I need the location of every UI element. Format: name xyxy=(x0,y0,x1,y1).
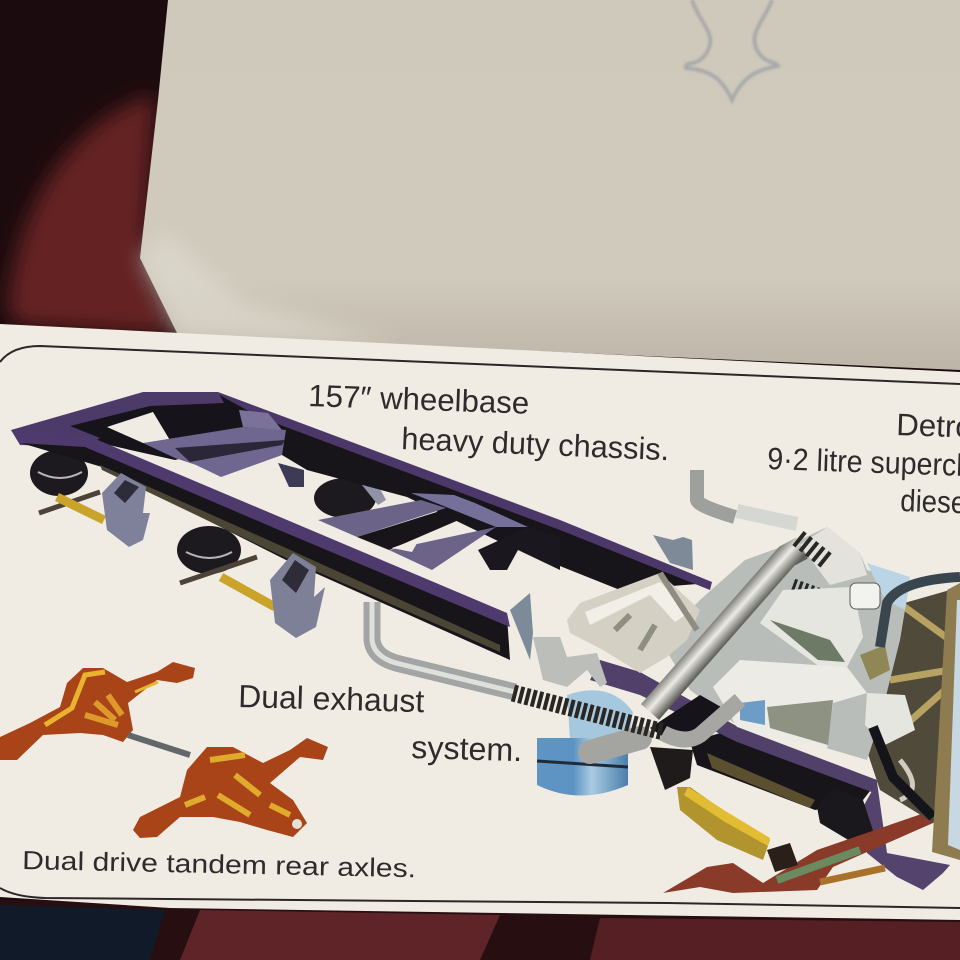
leaf springs xyxy=(39,492,275,607)
cross members xyxy=(143,427,286,477)
label: exhaust xyxy=(238,678,523,768)
rear cross frame xyxy=(60,394,286,460)
intake ribs xyxy=(793,585,848,605)
pipe rib collar xyxy=(798,538,828,562)
drive shaft xyxy=(128,735,190,755)
axle: front xyxy=(133,738,328,838)
label: axles: Dual drive tandem rear axles. xyxy=(22,845,416,883)
box emblem xyxy=(686,0,778,100)
front frame horn xyxy=(863,782,950,890)
front axle and spring xyxy=(650,747,933,893)
label: engine xyxy=(767,407,960,521)
cooling fan and transmission xyxy=(850,590,950,830)
panel border line xyxy=(0,346,960,908)
label: wheelbase: heavy duty chassis. xyxy=(401,421,670,467)
chrome cap xyxy=(850,583,880,609)
spring hanger plate xyxy=(817,787,877,847)
large intake pipe xyxy=(650,548,802,712)
beige box xyxy=(140,0,960,370)
rear suspension bags xyxy=(30,402,386,574)
axle: back xyxy=(0,662,195,760)
rocker cover xyxy=(760,587,863,667)
dark gap behind pipes xyxy=(650,695,735,745)
back rail and web xyxy=(218,394,710,590)
lower manifold xyxy=(713,660,867,750)
flexible coil pipe xyxy=(513,693,664,732)
label: exhaust: Dual exhaust xyxy=(238,678,425,719)
generator xyxy=(865,693,915,745)
label: exhaust: system. xyxy=(411,729,523,768)
chassis frame xyxy=(11,392,950,890)
front rail and web xyxy=(21,438,510,660)
front lower rail xyxy=(690,728,877,810)
white printed panel xyxy=(0,324,960,920)
hoses xyxy=(880,577,960,647)
engine body xyxy=(660,527,910,760)
chassis brackets xyxy=(102,473,693,660)
label: wheelbase: 157″ wheelbase xyxy=(308,378,530,421)
dual exhaust pipes xyxy=(372,470,797,740)
rear axles xyxy=(0,662,328,838)
radiator frame xyxy=(932,583,960,860)
label: wheelbase xyxy=(308,378,670,467)
blower head xyxy=(800,527,867,585)
engine xyxy=(567,527,960,860)
muffler xyxy=(533,637,640,796)
left manifold block xyxy=(567,573,700,673)
